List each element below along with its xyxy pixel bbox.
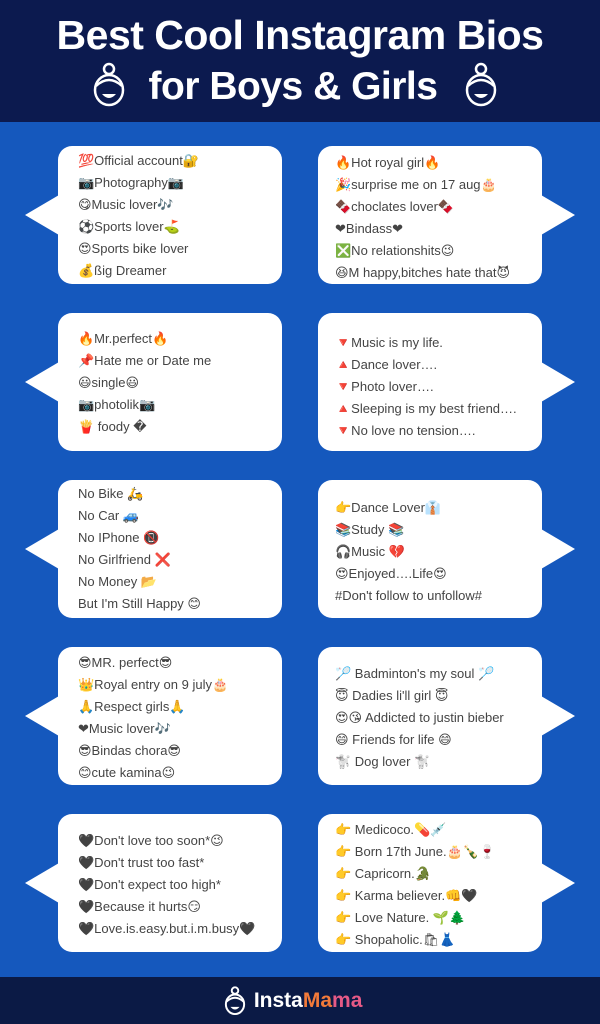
bubble 3 left: No Car 🚙: [78, 508, 139, 523]
title line 2: for Boys & Girls: [149, 65, 437, 108]
bubble 1 left: 💯Official account🔐: [78, 153, 199, 168]
bubble 5 right: 👉 Love Nature. 🌱🌲: [335, 910, 465, 925]
bubble 2 right: 🔻No love no tension….: [335, 423, 475, 438]
bubble 4 right: 🐩 Dog lover 🐩: [335, 754, 430, 769]
bubble 3 left: No Girlfriend ❌: [78, 552, 171, 567]
bubble 5 right: 👉 Shopaholic.🛍👗: [335, 932, 455, 947]
bubble 5 right: 👉 Medicoco.💊💉: [335, 822, 446, 837]
bubble 2 left: 🍟 foody �: [78, 419, 147, 434]
bubble 5 right: 👉 Born 17th June.🎂🍾🍷: [335, 844, 495, 859]
bubble 1 right: [318, 146, 542, 284]
bubble 3 left: No Bike 🛵: [78, 486, 143, 501]
bubble 4 left: 😊cute kamina😉: [78, 765, 175, 780]
bubble 1 left: 💰ßig Dreamer: [78, 263, 166, 278]
bubble 4 right: 😇 Dadies li'll girl 😇: [335, 688, 448, 703]
bubble 1 left: 📷Photography📷: [78, 175, 184, 190]
bubble 5 left: [58, 814, 282, 952]
bubble 5 left: 🖤Because it hurts😏: [78, 899, 201, 914]
bubble 3 right: 👉Dance Lover👔: [335, 500, 441, 515]
bubble 1 right: 😆M happy,bitches hate that😈: [335, 265, 510, 280]
bubble 3 right: 🎧Music 💔: [335, 544, 405, 559]
bubble 2 right: 🔻Music is my life.: [335, 335, 443, 350]
bubble 5 left: 🖤Don't trust too fast*: [78, 855, 204, 870]
bubble 2 right: 🔺Sleeping is my best friend….: [335, 401, 517, 416]
bubble 2 left: 📌Hate me or Date me: [78, 353, 211, 368]
bubble 3 right: [318, 480, 542, 618]
bubble 1 left: 😍Sports bike lover: [78, 241, 188, 256]
bubble 5 right: 👉 Capricorn.🐊: [335, 866, 431, 881]
bubble 3 left: No IPhone 📵: [78, 530, 159, 545]
bubble 4 left: 😎Bindas chora😎: [78, 743, 181, 758]
bubble 5 right: [318, 814, 542, 952]
bubble 2 right: 🔻Photo lover….: [335, 379, 434, 394]
icon: face right: [466, 62, 496, 106]
bubble 4 right: 😍😘 Addicted to justin bieber: [335, 710, 504, 725]
bubble 4 right: 😄 Friends for life 😄: [335, 732, 452, 747]
bubble 2 left: 🔥Mr.perfect🔥: [78, 331, 168, 346]
bubble 3 left: But I'm Still Happy 😊: [78, 596, 201, 611]
bubble 4 left: [58, 647, 282, 785]
bubble 1 right: 🎉surprise me on 17 aug🎂: [335, 177, 497, 192]
bubble 1 right: 🍫choclates lover🍫: [335, 199, 454, 214]
bubble 5 left: 🖤Don't expect too high*: [78, 877, 221, 892]
bubble 4 left: 👑Royal entry on 9 july🎂: [78, 677, 228, 692]
footer logo: InstaMama: [254, 989, 362, 1012]
bubble 1 left: 😋Music lover🎶: [78, 197, 173, 212]
bubble 4 right: [318, 647, 542, 785]
bubble 1 right: ❎No relationshits😉: [335, 243, 454, 258]
bubble 3 left: [58, 480, 282, 618]
bubble 3 left: No Money 📂: [78, 574, 157, 589]
bubble 3 right: #Don't follow to unfollow#: [335, 588, 482, 603]
bubble 4 right: 🏸 Badminton's my soul 🏸: [335, 666, 494, 681]
bubble 2 right: [318, 313, 542, 451]
icon: face left: [94, 62, 124, 106]
bubble 3 right: 😍Enjoyed….Life😍: [335, 566, 447, 581]
bubble 1 right: 🔥Hot royal girl🔥: [335, 155, 440, 170]
footer: [0, 977, 600, 1024]
bubble 4 left: 🙏Respect girls🙏: [78, 699, 186, 714]
title line 1: Best Cool Instagram Bios: [57, 12, 543, 58]
bubble 5 right: 👉 Karma believer.👊🖤: [335, 888, 478, 903]
bubble 1 right: ❤Bindass❤: [335, 221, 403, 236]
bubble 2 right: 🔺Dance lover….: [335, 357, 437, 372]
bubble 5 left: 🖤Love.is.easy.but.i.m.busy🖤: [78, 921, 255, 936]
footer logo: [224, 986, 363, 1015]
header: [0, 0, 600, 122]
bubble 1 left: [58, 146, 282, 284]
bubble 2 left: [58, 313, 282, 451]
bubble 1 left: ⚽Sports lover⛳: [78, 219, 180, 234]
bubble 3 right: 📚Study 📚: [335, 522, 404, 537]
bubble 2 left: 😃single😃: [78, 375, 139, 390]
bubble 5 left: 🖤Don't love too soon*😉: [78, 833, 224, 848]
bubble 2 left: 📷photolik📷: [78, 397, 155, 412]
bubble 4 left: ❤Music lover🎶: [78, 721, 171, 736]
bubble 4 left: 😎MR. perfect😎: [78, 655, 172, 670]
